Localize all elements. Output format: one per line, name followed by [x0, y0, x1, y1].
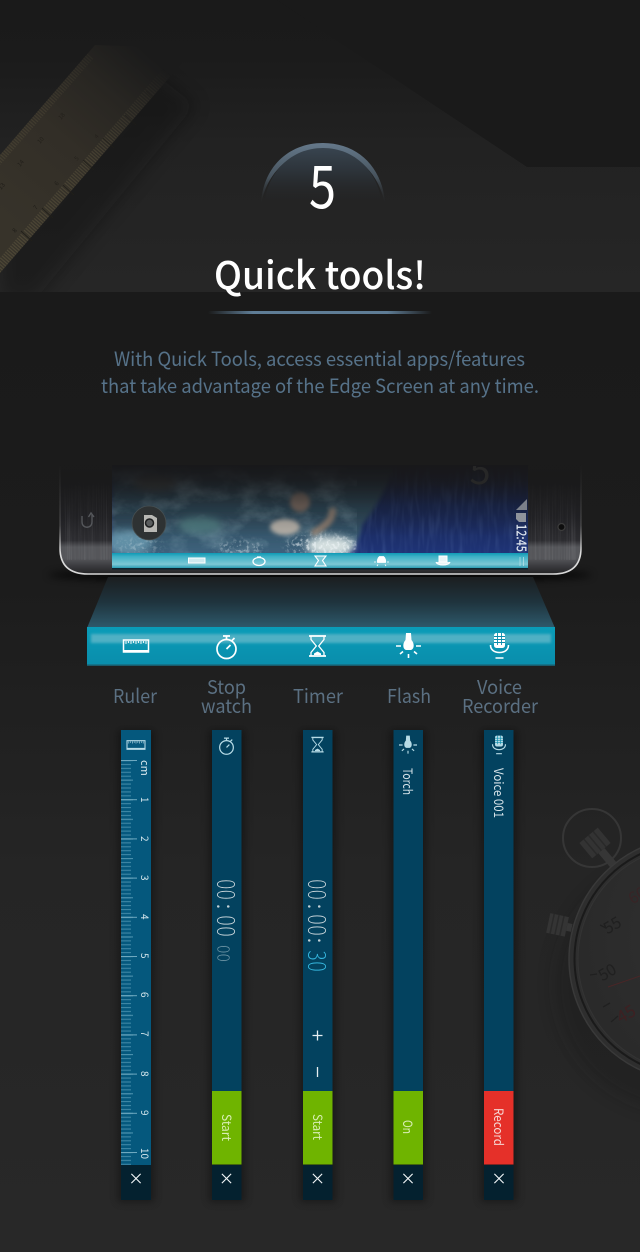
ruler scale — [121, 760, 153, 1165]
flash strip icon — [399, 736, 417, 754]
mini flash icon — [374, 556, 389, 566]
mini stopwatch icon — [253, 557, 265, 566]
decorative ruler: 5 — [72, 154, 81, 162]
icon: ruler — [124, 640, 148, 652]
voice strip icon — [493, 736, 505, 754]
bezel streaks — [65, 502, 576, 560]
close button: × — [310, 1167, 325, 1189]
strip: voice recorder — [484, 730, 514, 1200]
intro text — [101, 343, 539, 399]
quick tools band — [87, 627, 555, 666]
close button: × — [128, 1167, 144, 1189]
ruler scale: 8 — [138, 1071, 153, 1077]
strip: voice recorder: Voice 001 — [490, 768, 509, 818]
timer strip icon — [311, 737, 324, 752]
timer time: : — [300, 937, 336, 944]
strip: voice recorder: Record — [490, 1108, 509, 1146]
close button: × — [219, 1167, 234, 1189]
phone body — [60, 462, 581, 574]
number 5: 5 — [309, 140, 336, 225]
tool labels: watch — [201, 692, 252, 719]
tool labels: Timer — [293, 682, 344, 709]
ruler scale: 9 — [138, 1110, 153, 1116]
tool labels: Flash — [387, 682, 431, 709]
ruler scale: 2 — [138, 836, 153, 842]
status bar — [512, 499, 532, 552]
stopwatch time: 00 — [211, 945, 237, 962]
decorative ruler: 7 — [31, 202, 40, 211]
phone rim — [60, 465, 581, 574]
strip: ruler — [121, 730, 153, 1200]
ruler scale: 10 — [138, 1148, 153, 1160]
decorative ruler: 4 — [92, 131, 101, 140]
decorative ruler: 8 — [10, 225, 19, 234]
stopwatch time: 00 — [209, 915, 245, 937]
phone — [58, 466, 582, 581]
camera shortcut — [132, 506, 166, 540]
status bar: 12:45 — [512, 524, 532, 552]
phone shadow — [48, 567, 592, 583]
ruler scale: 3 — [138, 875, 153, 881]
strip: flash: On — [399, 1120, 418, 1134]
stopwatch time: : — [209, 903, 245, 910]
strip: stopwatch: Start — [218, 1114, 237, 1141]
projection beam — [87, 577, 555, 628]
stopwatch illustration: 55 — [598, 909, 625, 939]
stopwatch time — [209, 879, 245, 962]
decorative ruler — [0, 51, 156, 286]
ruler strip icon — [127, 741, 145, 749]
mini timer icon — [315, 556, 326, 566]
tool labels: Ruler — [113, 682, 158, 709]
phone edge band — [112, 553, 528, 570]
mini mic icon — [436, 556, 450, 565]
stopwatch illustration: 45 — [611, 997, 640, 1028]
icon: flash — [396, 633, 421, 658]
ruler scale: 7 — [138, 1031, 153, 1037]
back key — [82, 513, 94, 527]
ruler scale: cm — [137, 760, 153, 776]
timer time: 00 — [300, 914, 336, 936]
icon: voice recorder — [490, 633, 508, 658]
intro text: that take advantage of the Edge Screen at any time. — [101, 370, 539, 399]
tool labels: Voice — [477, 673, 522, 700]
tool labels: Stop — [207, 673, 246, 700]
intro text: With Quick Tools, access essential apps/features — [114, 343, 525, 372]
flash on button — [394, 1091, 423, 1164]
phone screen wallpaper — [112, 476, 528, 553]
tool labels — [113, 673, 539, 719]
title underline — [208, 311, 432, 314]
ruler scale: 4 — [138, 914, 153, 920]
timer time: 30 — [300, 950, 336, 972]
decorative ruler: 10 — [35, 134, 46, 145]
stopwatch illustration: 50 — [593, 956, 620, 986]
strip: flash — [394, 730, 423, 1200]
decorative ruler: 6 — [52, 178, 61, 187]
decorative ruler: 14 — [15, 157, 26, 168]
clock digit on screen: 5 — [469, 440, 491, 495]
title: Quick tools! — [214, 245, 426, 300]
close button: × — [491, 1167, 507, 1189]
stopwatch illustration — [546, 809, 640, 1110]
timer start button — [303, 1091, 332, 1164]
ruler scale: 5 — [138, 953, 153, 959]
section number badge — [261, 140, 385, 225]
strip: stopwatch — [209, 730, 245, 1200]
timer time: 00 — [300, 879, 336, 900]
decorative ruler: 18 — [56, 110, 67, 121]
mini ruler icon — [188, 558, 205, 563]
tool strip shadows — [118, 730, 517, 1202]
timer time: : — [300, 903, 336, 910]
timer time — [300, 879, 336, 972]
ruler scale: 6 — [138, 992, 153, 998]
icon: hourglass — [309, 636, 326, 656]
stopwatch time: 00 — [209, 879, 245, 900]
plus minus — [312, 1030, 322, 1077]
strip: timer: Start — [309, 1114, 328, 1140]
ruler scale: 1 — [138, 797, 153, 803]
close button: × — [400, 1167, 416, 1189]
front camera — [558, 524, 565, 530]
record button — [484, 1091, 514, 1164]
stopwatch start button — [212, 1091, 242, 1164]
strip: timer — [300, 730, 336, 1200]
tool labels: Recorder — [462, 692, 539, 719]
icon: stopwatch — [217, 636, 236, 658]
strip: flash: Torch — [399, 768, 418, 795]
edge handle — [520, 557, 524, 566]
stopwatch strip icon — [220, 738, 233, 754]
